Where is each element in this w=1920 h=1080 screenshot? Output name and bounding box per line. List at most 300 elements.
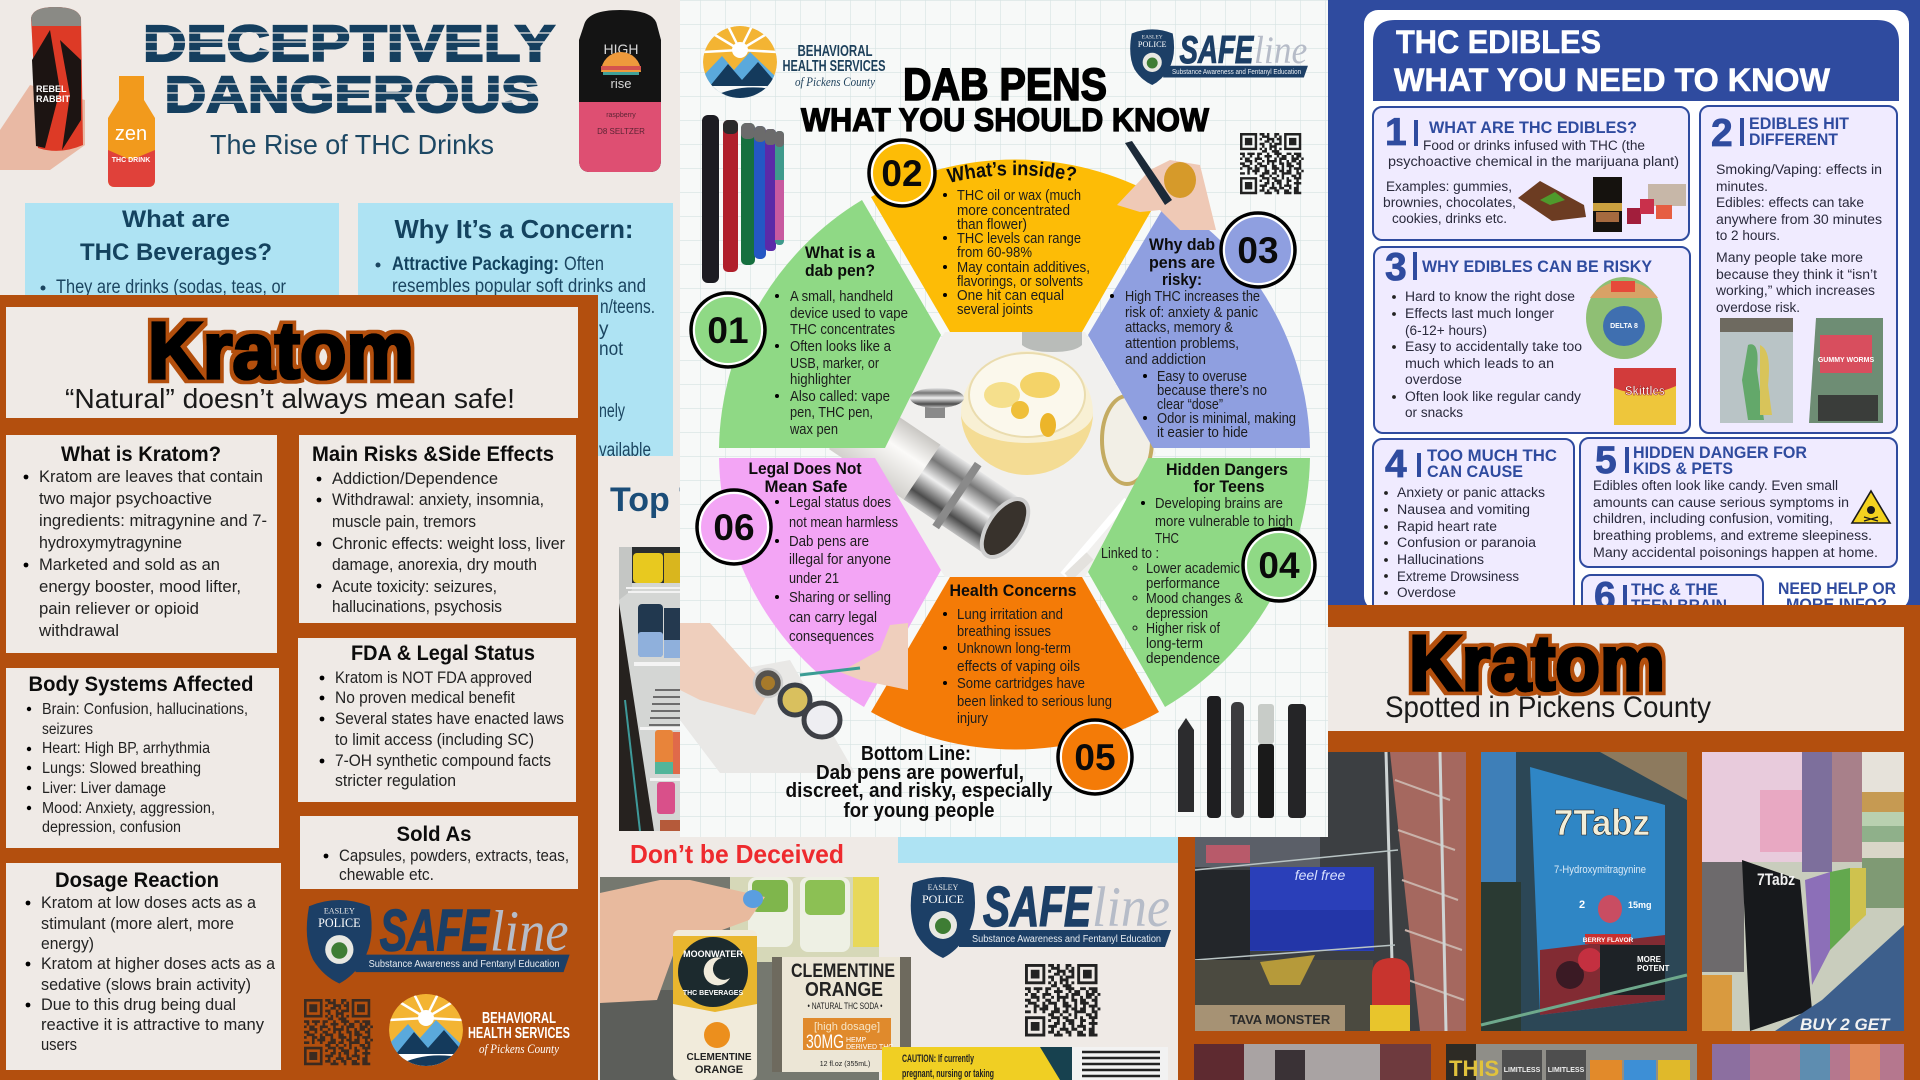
header box: Kratom spotted: [1328, 619, 1904, 731]
wheel segment 04: Hidden dangers for teens: depression: [1146, 606, 1208, 622]
card 5: Hidden danger for kids and pets: HIDDEN DANGER FOR: [1633, 443, 1807, 462]
panel: Kratom spotted in Pickens County: [1178, 605, 1920, 1080]
photo row: lower shelf photos: LIMITLESS: [1548, 1067, 1585, 1074]
photo: Moonwater can in hand: MOONWATER: [683, 949, 743, 959]
wheel segment 05: Health concerns: breathing issues: [957, 624, 1051, 640]
card 1: What are THC edibles: psychoactive chemical in the marijuana plant): [1388, 154, 1679, 169]
wheel segment 02: What's inside: from 60-98%: [957, 245, 1032, 261]
card 2: Edibles hit different: EDIBLES HIT: [1749, 114, 1850, 133]
QR code in header: [1240, 133, 1304, 194]
panel: What are THC Beverages: [25, 203, 339, 303]
title: Deceptively Dangerous: DANGEROUS: [164, 66, 540, 123]
wheel segment 01: What is a dab pen: USB, marker, or: [790, 356, 879, 372]
wheel segment 02: What's inside: What’s inside?: [946, 160, 1076, 182]
card 4: Too much THC can cause: Confusion or paranoia: [1397, 535, 1537, 550]
photo: Moonwater can in hand: CLEMENTINE: [686, 1052, 752, 1063]
card 4: Too much THC can cause: Rapid heart rate: [1397, 519, 1497, 534]
photo row: lower shelf photos: LIMITLESS: [1504, 1067, 1541, 1074]
text box: FDA and Legal Status: [298, 638, 576, 802]
wheel segment 04: Hidden dangers for teens: performance: [1146, 576, 1220, 592]
wheel segment 04: Hidden dangers for teens: Mood changes &: [1146, 591, 1243, 607]
photo: Moonwater can in hand: THC BEVERAGES: [683, 990, 743, 997]
wheel segment 05: Health concerns: Some cartridges have: [957, 676, 1085, 692]
card 3: Why edibles can be risky: Effects last much longer: [1405, 306, 1555, 321]
panel: Why It's a Concern: n/teens.: [600, 297, 655, 318]
card 3: Why edibles can be risky: (6-12+ hours): [1405, 323, 1487, 338]
text: bottom line: [786, 743, 1053, 822]
text box: Body Systems Affected: Brain: Confusion, hallucinations,: [42, 701, 248, 718]
wheel segment 06: Legal does not mean safe: illegal for anyone: [789, 552, 891, 568]
logo: Behavioral Health Services header: HEALTH SERVICES: [782, 58, 886, 75]
logo: SAFEline header: POLICE: [1138, 40, 1167, 49]
heading: Don't be Deceived: Don’t be Deceived: [630, 839, 844, 869]
panel: What are THC Beverages: What are: [122, 206, 230, 233]
logo: Behavioral Health Services on Kratom poster: HEALTH SERVICES: [468, 1025, 570, 1042]
photo: Moonwater can in hand: [600, 877, 879, 1080]
wheel segment 06: Legal does not mean safe: Legal Does Not: [748, 460, 862, 478]
text box: Main Risks and Side Effects: Acute toxicity: seizures,: [332, 578, 497, 596]
photo: Clementine Orange label closeup: ORANGE: [805, 979, 883, 1001]
title: Dab Pens What You Should Know: [801, 59, 1210, 138]
icon: row of black dab pens: [1178, 696, 1306, 818]
logo: SAFEline lower center: Substance Awareness and Fentanyl Education: [972, 934, 1161, 945]
text: bottom line: for young people: [844, 800, 994, 822]
card 3: Why edibles can be risky: [1374, 246, 1690, 433]
card 2: Edibles hit different: DIFFERENT: [1749, 130, 1839, 149]
header box: Kratom spotted: Spotted in Pickens County: [1385, 691, 1711, 724]
text box: Sold As: [300, 816, 578, 889]
heading: Top THC drinks: Top T: [610, 481, 700, 519]
logo: SAFEline header: SAFE: [1180, 29, 1254, 72]
wheel segment 05: Health concerns: been linked to serious lung: [957, 694, 1112, 710]
wheel segment 04: Hidden dangers for teens: for Teens: [1194, 478, 1264, 496]
panel: Why It's a Concern: Attractive Packaging:: [392, 254, 559, 275]
text box: Dosage Reaction: users: [41, 1036, 77, 1054]
card 1: What are THC edibles: WHAT ARE THC EDIBLES?: [1429, 118, 1637, 137]
number badge 06: 06: [713, 507, 755, 548]
icon: hand holding red can: [0, 7, 85, 170]
photo: Clementine Orange label closeup: CLEMENTINE: [791, 961, 895, 982]
photo: caution label: CAUTION: If currently: [902, 1053, 975, 1065]
logo: Behavioral Health Services on Kratom poster: [389, 994, 570, 1066]
card 6: THC and the teen brain: TEEN BRAIN: [1631, 596, 1727, 615]
card 5: Hidden danger for kids and pets: amounts can cause serious symptoms in: [1593, 495, 1849, 510]
logo: Behavioral Health Services header: BEHAVIORAL: [798, 43, 873, 60]
cyan strip: lower part of a covered panel: [898, 836, 1178, 863]
text box: Body Systems Affected: Lungs: Slowed breathing: [42, 760, 201, 777]
wheel segment 02: What's inside: [871, 160, 1152, 332]
text box: Body Systems Affected: Heart: High BP, arrhythmia: [42, 740, 210, 757]
wheel segment 05: Health concerns: Unknown long-term: [957, 641, 1071, 657]
wheel segment 02: What's inside: more concentrated: [957, 203, 1070, 219]
card 2: Edibles hit different: [1700, 106, 1897, 433]
wheel segment 06: Legal does not mean safe: Dab pens are: [789, 534, 869, 550]
number badge 04: 04: [1258, 545, 1300, 586]
wheel segment 03: Why dab pens are risky: Why dab: [1149, 236, 1215, 254]
wheel segment 03: Why dab pens are risky: [1088, 200, 1310, 448]
number badge 02: 02: [881, 153, 923, 194]
center photo: dab jar and vaporizer: [826, 332, 1156, 577]
wheel segment 01: What is a dab pen: Often looks like a: [790, 339, 892, 355]
wheel segment 04: Hidden dangers for teens: long-term: [1146, 636, 1203, 652]
card 5: Hidden danger for kids and pets: 5: [1595, 439, 1617, 482]
text box: Dosage Reaction: sedative (slows brain activity): [41, 976, 251, 994]
card 3: Why edibles can be risky: Often look like regular candy: [1405, 389, 1581, 404]
card 5: Hidden danger for kids and pets: Edibles often look like candy. Even small: [1593, 478, 1838, 493]
icon: hand holding red can: RABBIT: [36, 94, 70, 104]
text box: Body Systems Affected: seizures: [42, 721, 93, 738]
header box: Kratom title: “Natural” doesn’t always mean safe!: [65, 383, 515, 414]
text box: Sold As: Capsules, powders, extracts, teas,: [339, 847, 569, 865]
text box: Dosage Reaction: Kratom at low doses acts as a: [41, 894, 257, 912]
icon: hand holding red can: REBEL: [36, 84, 67, 94]
card 1: What are THC edibles: brownies, chocolates,: [1383, 195, 1516, 210]
photo: 7Tabz blue box: 7-Hydroxymitragynine: [1554, 864, 1646, 876]
card 5: Hidden danger for kids and pets: [1580, 438, 1897, 567]
card 6: THC and the teen brain: THC & THE: [1631, 580, 1718, 599]
photo: Clementine Orange label closeup: HEMP: [846, 1037, 867, 1044]
wheel segment 05: Health concerns: injury: [957, 711, 989, 727]
text box: Body Systems Affected: Mood: Anxiety, aggression,: [42, 800, 215, 817]
panel: Why It's a Concern: [358, 203, 673, 461]
photo: Clementine Orange label closeup: 30MG: [806, 1032, 844, 1053]
header box: Kratom title: [6, 306, 578, 418]
card 4: Too much THC can cause: Extreme Drowsiness: [1397, 569, 1519, 584]
callout: Need help or more info: MORE INFO?: [1786, 595, 1887, 614]
logo: Behavioral Health Services header: of Pickens County: [795, 74, 875, 89]
card 1: What are THC edibles: [1373, 107, 1689, 240]
photo: hands holding pen and jar above wheel: [1117, 141, 1216, 230]
wheel segment 06: Legal does not mean safe: [719, 458, 941, 707]
wheel segment 02: What's inside: THC levels can range: [957, 231, 1081, 247]
card 3: Why edibles can be risky: overdose: [1405, 372, 1462, 387]
card 1: What are THC edibles: cookies, drinks etc.: [1392, 211, 1507, 226]
wheel segment 04: Hidden dangers for teens: Higher risk of: [1146, 621, 1221, 637]
card 5: Hidden danger for kids and pets: breathing problems, and extreme sleepiness.: [1593, 528, 1872, 543]
text box: Dosage Reaction: Kratom at higher doses acts as a: [41, 955, 276, 973]
text box: Main Risks and Side Effects: [299, 435, 576, 623]
icon: High Rise seltzer can: HIGH: [604, 41, 638, 57]
photo: 7Tabz blue box: 15mg: [1628, 900, 1652, 910]
wheel segment 01: What is a dab pen: [719, 200, 941, 448]
number badge 06: [697, 490, 771, 564]
wheel segment 01: What is a dab pen: Also called: vape: [790, 389, 890, 405]
subtitle: The Rise of THC Drinks: The Rise of THC Drinks: [210, 129, 494, 160]
icon: gummies and jar: [1627, 184, 1686, 224]
card 3: Why edibles can be risky: 3: [1385, 246, 1407, 289]
icon: Delta 8 gummies jar: [1586, 277, 1662, 359]
photo: Clementine Orange label closeup: DERIVED THC: [846, 1044, 893, 1051]
card 4: Too much THC can cause: Overdose: [1397, 585, 1456, 600]
text box: Dosage Reaction: Dosage Reaction: [55, 869, 219, 892]
logo: SAFEline lower center: EASLEY: [928, 883, 959, 892]
text box: What is Kratom: hydroxymytragynine: [39, 534, 182, 552]
wheel segment 02: What's inside: THC oil or wax (much: [957, 188, 1081, 204]
text box: Main Risks and Side Effects: Main Risks &Side Effects: [312, 443, 554, 466]
logo: SAFEline on Kratom poster: SAFE: [380, 898, 490, 964]
text box: What is Kratom: Marketed and sold as an: [39, 556, 220, 574]
text box: What is Kratom: Kratom are leaves that contain: [39, 468, 263, 486]
wheel segment 01: What is a dab pen: device used to vape: [790, 306, 908, 322]
logo: SAFEline lower center: SAFE: [983, 875, 1092, 939]
wheel segment 05: Health concerns: Health Concerns: [950, 582, 1076, 600]
text box: What is Kratom: ingredients: mitragynine and 7-: [39, 512, 267, 530]
icon: Delta 8 gummy worms bag: GUMMY WORMS: [1818, 357, 1874, 364]
wheel segment 04: Hidden dangers for teens: [1088, 458, 1310, 707]
photo: 7Tabz blue box: MORE: [1637, 955, 1662, 964]
wheel segment 01: What is a dab pen: What is a: [805, 244, 876, 262]
wheel segment 03: Why dab pens are risky: it easier to hide: [1157, 425, 1248, 441]
panel: THC edibles poster: [1328, 0, 1920, 625]
text box: What is Kratom: [6, 435, 277, 653]
number badge 05: 05: [1074, 737, 1116, 778]
card 4: Too much THC can cause: Anxiety or panic attacks: [1397, 485, 1545, 500]
text box: FDA and Legal Status: Kratom is NOT FDA approved: [335, 669, 532, 687]
icon: holographic gummy worm bag: [1720, 318, 1793, 423]
logo: SAFEline on Kratom poster: line: [490, 898, 569, 964]
wheel segment 04: Hidden dangers for teens: dependence: [1146, 651, 1220, 667]
card 2: Edibles hit different: working,” which increases: [1715, 283, 1875, 298]
photo: hands loading a dab jar on tray: [680, 623, 908, 773]
wheel segment 05: Health concerns: effects of vaping oils: [957, 659, 1080, 675]
icon: High Rise seltzer can: [579, 10, 661, 172]
panel: Dab Pens poster: [680, 0, 1328, 837]
panel: What are THC Beverages: THC Beverages?: [80, 239, 272, 266]
wheel segment 01: What is a dab pen: highlighter: [790, 372, 851, 388]
icon: High Rise seltzer can: rise: [611, 76, 631, 91]
QR code on Kratom poster: [304, 999, 373, 1065]
text box: Body Systems Affected: depression, confusion: [42, 819, 181, 836]
card 3: Why edibles can be risky: or snacks: [1405, 405, 1463, 420]
wheel segment 06: Legal does not mean safe: under 21: [789, 571, 839, 587]
text box: FDA and Legal Status: No proven medical benefit: [335, 689, 515, 707]
card 2: Edibles hit different: minutes.: [1716, 179, 1768, 194]
panel: Kratom poster: [0, 295, 598, 1080]
icon: poison warning triangle: [1852, 491, 1890, 523]
text box: FDA and Legal Status: FDA & Legal Status: [351, 642, 535, 665]
card 2: Edibles hit different: Many people take more: [1716, 250, 1863, 265]
card 3: Why edibles can be risky: Hard to know the right dose: [1405, 289, 1575, 304]
text box: Main Risks and Side Effects: hallucinations, psychosis: [332, 598, 502, 616]
wheel segment 01: What is a dab pen: pen, THC pen,: [790, 405, 873, 421]
card 6: THC and the teen brain: [1582, 575, 1763, 625]
title: Dab Pens What You Should Know: DAB PENS: [903, 59, 1107, 110]
wheel segment 02: What's inside: several joints: [957, 302, 1033, 318]
text box: What is Kratom: two major psychoactive: [39, 490, 212, 508]
card 4: Too much THC can cause: Nausea and vomiting: [1397, 502, 1530, 517]
callout: Need help or more info: [1778, 579, 1896, 614]
wheel segment 03: Why dab pens are risky: clear “dose”: [1157, 397, 1223, 413]
text box: Dosage Reaction: energy): [41, 935, 94, 953]
card 2: Edibles hit different: to 2 hours.: [1716, 228, 1780, 243]
logo: SAFEline header: Substance Awareness and Fentanyl Education: [1172, 69, 1301, 76]
text box: What is Kratom: What is Kratom?: [61, 443, 221, 466]
text box: Main Risks and Side Effects: damage, anorexia, dry mouth: [332, 556, 537, 574]
card 4: Too much THC can cause: 4: [1385, 443, 1407, 486]
wheel segment 05: Health concerns: [871, 577, 1159, 750]
wheel segment 02: What's inside: May contain additives,: [957, 260, 1090, 276]
wheel segment 04: Hidden dangers for teens: Lower academic: [1146, 561, 1240, 577]
header box: Kratom title: Kratom: [148, 306, 414, 395]
wheel segment 03: Why dab pens are risky: and addiction: [1125, 352, 1206, 368]
logo: SAFEline on Kratom poster: POLICE: [318, 916, 361, 930]
title: Deceptively Dangerous: DECEPTIVELY: [143, 15, 555, 72]
photo: 7Tabz blue box: 2: [1579, 899, 1585, 911]
panel: Why It's a Concern: nely: [599, 401, 625, 422]
panel: THC drinks background poster: [0, 0, 1180, 1080]
wheel segment 03: Why dab pens are risky: Odor is minimal, making: [1157, 411, 1296, 427]
logo: SAFEline lower center: line: [1092, 876, 1170, 939]
wheel segment 01: What is a dab pen: A small, handheld: [790, 289, 893, 305]
card 2: Edibles hit different: Smoking/Vaping: effects in: [1716, 162, 1882, 177]
text: bottom line: discreet, and risky, especially: [786, 780, 1053, 802]
icon: zen THC drink bottle: THC DRINK: [112, 157, 150, 164]
panel: Why It's a Concern: Why It’s a Concern:: [394, 214, 634, 244]
logo: Behavioral Health Services on Kratom poster: BEHAVIORAL: [482, 1010, 556, 1027]
text box: What is Kratom: pain reliever or opioid: [39, 600, 199, 618]
logo: Behavioral Health Services header: [703, 26, 886, 98]
photo: 7Tabz blue box: 7Tabz: [1554, 802, 1650, 843]
card 2: Edibles hit different: anywhere from 30 minutes: [1716, 212, 1882, 227]
wheel segment 06: Legal does not mean safe: not mean harmless: [789, 515, 898, 531]
wheel segment 04: Hidden dangers for teens: Hidden Dangers: [1166, 461, 1288, 479]
wheel segment 02: What's inside: One hit can equal: [957, 288, 1064, 304]
number badge 04: [1243, 529, 1315, 601]
icon: High Rise seltzer can: D8 SELTZER: [597, 127, 645, 136]
wheel segment 01: What is a dab pen: THC concentrates: [790, 322, 895, 338]
logo: SAFEline header: [1130, 29, 1308, 85]
wheel segment 03: Why dab pens are risky: High THC increases the: [1125, 289, 1260, 305]
photo: 7Tabz blue box: POTENT: [1637, 964, 1670, 973]
text box: Body Systems Affected: [6, 668, 279, 848]
card 4: Too much THC can cause: TOO MUCH THC: [1427, 446, 1557, 465]
icon: Delta 8 gummy worms bag: [1809, 318, 1883, 423]
text box: FDA and Legal Status: Several states have enacted laws: [335, 710, 564, 728]
photo: glass case with blue box: TAVA MONSTER: [1230, 1012, 1331, 1027]
text box: Sold As: Sold As: [396, 823, 472, 846]
panel: Why It's a Concern: not: [599, 339, 624, 360]
photo: glass case with blue box: [1195, 752, 1466, 1031]
text box: Main Risks and Side Effects: Addiction/Dependence: [332, 470, 498, 488]
number badge 01: 01: [707, 310, 749, 351]
card 4: Too much THC can cause: Hallucinations: [1397, 552, 1484, 567]
panel: Why It's a Concern: resembles popular soft drinks and: [392, 276, 646, 297]
card 4: Too much THC can cause: [1373, 439, 1574, 619]
text box: Body Systems Affected: Liver: Liver damage: [42, 780, 166, 797]
text box: Dosage Reaction: stimulant (more alert, more: [41, 915, 234, 933]
logo: Behavioral Health Services on Kratom poster: of Pickens County: [479, 1041, 559, 1056]
photo: store shelf with pink and black boxes: BUY 2 GET: [1800, 1015, 1891, 1034]
title: Deceptively Dangerous: [140, 15, 560, 123]
number badge 01: [691, 293, 765, 367]
wheel segment 03: Why dab pens are risky: because there’s no: [1157, 383, 1267, 399]
card 3: Why edibles can be risky: much which leads to an: [1405, 356, 1554, 371]
number badge 03: 03: [1237, 230, 1279, 271]
number badge 02: [869, 140, 935, 206]
panel: Why It's a Concern: vailable: [599, 440, 651, 461]
wheel segment 03: Why dab pens are risky: risk of: anxiety & panic: [1125, 305, 1258, 321]
number badge 03: [1221, 213, 1295, 287]
panel: Why It's a Concern: Often: [564, 254, 604, 275]
header: THC Edibles What You Need To Know: [1373, 20, 1899, 101]
card 2: Edibles hit different: Edibles: effects can take: [1716, 195, 1864, 210]
wheel segment 05: Health concerns: Lung irritation and: [957, 607, 1063, 623]
text box: Dosage Reaction: Due to this drug being dual: [41, 996, 236, 1014]
card 5: Hidden danger for kids and pets: children, including confusion, vomiting,: [1593, 511, 1833, 526]
panel: What are THC Beverages: They are drinks (sodas, teas, or: [56, 277, 287, 298]
photo: store shelf with pink and black boxes: 7Tabz: [1757, 870, 1795, 889]
panel: Why It's a Concern: y: [599, 319, 609, 340]
wheel segment 06: Legal does not mean safe: Sharing or selling: [789, 590, 891, 606]
photo: Clementine Orange label closeup: [772, 957, 911, 1072]
text box: FDA and Legal Status: to limit access (including SC): [335, 731, 534, 749]
photo: Clementine Orange label closeup: • NATURAL THC SODA •: [808, 1001, 882, 1011]
wheel segment 04: Hidden dangers for teens: Linked to :: [1101, 546, 1159, 562]
text box: Dosage Reaction: reactive it is attractive to many: [41, 1016, 265, 1034]
card 5: Hidden danger for kids and pets: Many accidental poisonings happen at home.: [1593, 545, 1878, 560]
icon: chocolate bar: [1593, 177, 1622, 232]
wheel segment 06: Legal does not mean safe: can carry legal: [789, 610, 877, 626]
photo row: lower shelf photos: [1194, 1044, 1904, 1080]
card 1: What are THC edibles: Examples: gummies,: [1386, 179, 1512, 194]
number badge 05: [1058, 720, 1132, 794]
logo: SAFEline lower center: POLICE: [922, 892, 964, 906]
wheel segment 03: Why dab pens are risky: attacks, memory &: [1125, 320, 1233, 336]
logo: SAFEline lower center: [911, 875, 1171, 958]
photo: Moonwater can in hand: ORANGE: [695, 1064, 743, 1076]
card 4: Too much THC can cause: CAN CAUSE: [1427, 462, 1523, 481]
wheel segment 03: Why dab pens are risky: Easy to overuse: [1157, 369, 1247, 385]
logo: SAFEline header: EASLEY: [1142, 34, 1163, 40]
text box: FDA and Legal Status: 7-OH synthetic compound facts: [335, 752, 551, 770]
header box: Kratom spotted: Kratom: [1409, 619, 1665, 707]
wheel segment 01: What is a dab pen: wax pen: [789, 422, 838, 438]
card 6: THC and the teen brain: 6: [1594, 575, 1616, 618]
icon: Skittles lookalike package: [1614, 368, 1676, 425]
text box: What is Kratom: energy booster, mood lifter,: [39, 578, 241, 596]
text box: Main Risks and Side Effects: muscle pain, tremors: [332, 513, 476, 531]
photo: caution label: [882, 1047, 1168, 1080]
title: Dab Pens What You Should Know: WHAT YOU SHOULD KNOW: [801, 102, 1210, 138]
icon: Skittles lookalike package: Skittles: [1625, 383, 1665, 398]
photo: Clementine Orange label closeup: 12 fl.oz (355mL): [820, 1061, 870, 1068]
text box: What is Kratom: withdrawal: [38, 622, 119, 640]
text box: Main Risks and Side Effects: Withdrawal: anxiety, insomnia,: [332, 491, 544, 509]
logo: SAFEline on Kratom poster: Substance Awareness and Fentanyl Education: [369, 959, 560, 970]
QR code lower center: [1025, 964, 1100, 1036]
photo: Clementine Orange label closeup: [high dosage]: [814, 1021, 880, 1033]
wheel segment 01: What is a dab pen: dab pen?: [805, 262, 875, 280]
text: bottom line: Bottom Line:: [861, 743, 971, 765]
card 3: Why edibles can be risky: Easy to accidentally take too: [1405, 339, 1582, 354]
card 2: Edibles hit different: overdose risk.: [1716, 300, 1800, 315]
icon: High Rise seltzer can: raspberry: [606, 112, 636, 119]
header: THC Edibles What You Need To Know: THC EDIBLES: [1396, 24, 1601, 60]
text box: FDA and Legal Status: stricter regulation: [335, 772, 456, 790]
logo: SAFEline on Kratom poster: [307, 898, 570, 983]
wheel segment 04: Hidden dangers for teens: Developing brains are: [1155, 496, 1283, 512]
text box: Main Risks and Side Effects: Chronic effects: weight loss, liver: [332, 535, 565, 553]
wheel segment 03: Why dab pens are risky: risky:: [1162, 271, 1202, 289]
text box: Sold As: chewable etc.: [339, 866, 434, 884]
icon: row of colored vape pens: [702, 115, 784, 283]
card 1: What are THC edibles: 1: [1385, 111, 1407, 154]
wheel segment 04: Hidden dangers for teens: THC: [1155, 531, 1179, 547]
icon: zen THC drink bottle: [108, 76, 155, 187]
photo: 7Tabz blue box: [1481, 752, 1687, 1031]
card 3: Why edibles can be risky: WHY EDIBLES CAN BE RISKY: [1422, 257, 1653, 276]
photo: store fridge: [619, 547, 681, 831]
